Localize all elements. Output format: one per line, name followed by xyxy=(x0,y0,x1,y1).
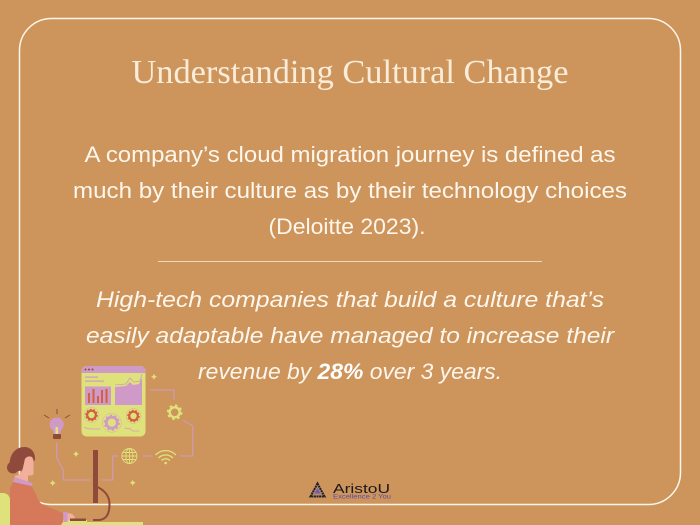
text block: intro xyxy=(73,142,627,239)
text block: intro: (Deloitte 2023). xyxy=(268,214,426,239)
logo mark xyxy=(310,484,324,496)
text block: intro: much by their culture as by their technology choices xyxy=(73,178,627,203)
desk xyxy=(40,520,143,525)
icon: gear xyxy=(168,406,182,419)
text block: statistic: easily adaptable have managed to increase their xyxy=(86,323,616,348)
icon: wifi xyxy=(156,451,176,464)
icon: globe xyxy=(122,448,137,464)
icon: dashboard window xyxy=(82,366,146,436)
sparkles xyxy=(50,374,157,486)
icon: light bulb xyxy=(44,409,70,439)
logo wordmark: AristoU xyxy=(333,482,390,496)
text block: statistic: High-tech companies that build a culture that’s xyxy=(96,287,604,312)
connector lines xyxy=(57,390,193,480)
title: Understanding Cultural Change xyxy=(132,54,568,91)
text block: intro: A company’s cloud migration journey is defined as xyxy=(84,142,616,167)
person xyxy=(7,447,86,525)
divider xyxy=(158,261,542,262)
text block: statistic: revenue by 28% over 3 years. xyxy=(198,359,502,384)
chair xyxy=(0,493,10,525)
illustration: person at dashboard xyxy=(0,366,193,525)
monitor stand xyxy=(93,450,110,520)
logo tagline: Excellence 2 You xyxy=(333,494,391,500)
text block: statistic xyxy=(86,287,616,384)
logo: AristoU xyxy=(310,482,391,500)
